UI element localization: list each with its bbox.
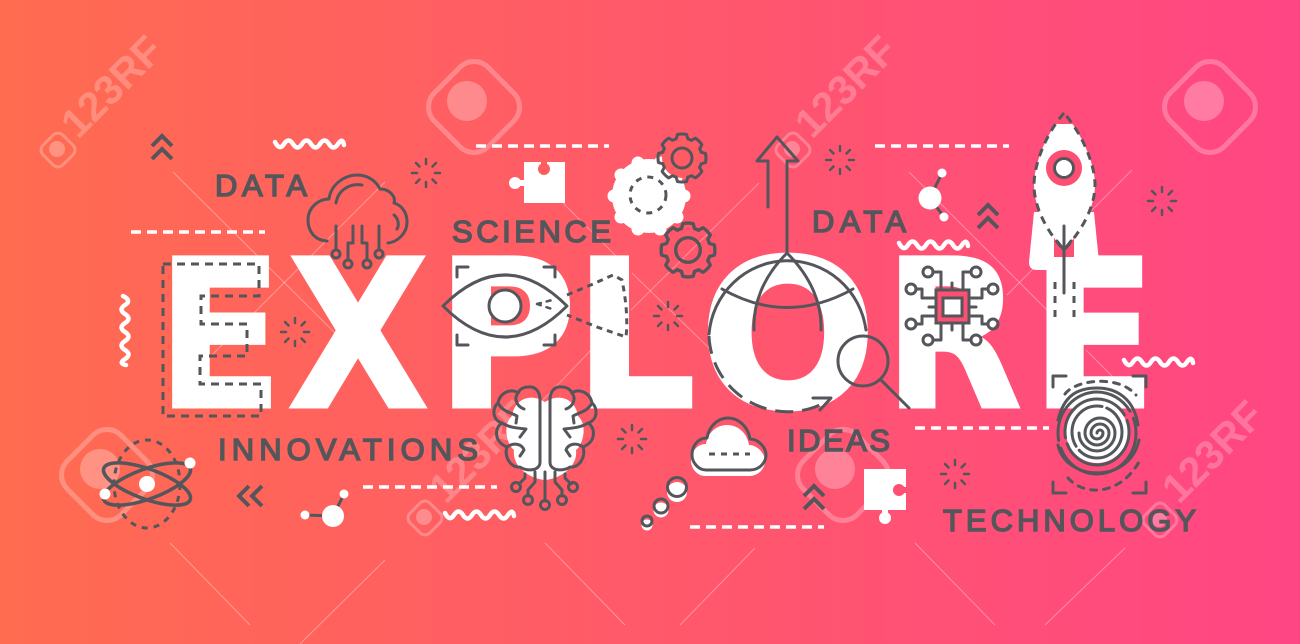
icon: atom — [99, 440, 196, 528]
title: EXPLORE: O — [699, 215, 877, 456]
label: SCIENCE: SCIENCE — [452, 214, 611, 249]
title: EXPLORE — [156, 215, 1156, 456]
title: EXPLORE: E — [1031, 216, 1156, 456]
icon: microchip — [906, 267, 998, 345]
watermark stamps: 123RF — [52, 27, 171, 146]
icon: outline gear bottom — [661, 223, 715, 277]
white waves — [122, 140, 1193, 518]
dashed white lines — [131, 146, 1049, 527]
watermark stamps: 123RF — [1153, 392, 1272, 511]
watermark stamps: 123RF — [786, 27, 905, 146]
icon: puzzle top — [509, 160, 565, 203]
icon: brain — [494, 387, 596, 510]
label: IDEAS: IDEAS — [787, 423, 890, 458]
icon: outline gear top — [658, 134, 706, 182]
label: DATA right: DATA — [812, 204, 906, 239]
title: EXPLORE: E — [156, 217, 283, 456]
label: DATA left: DATA — [215, 168, 307, 203]
icon: cloud circuit — [308, 175, 407, 268]
chevrons — [152, 136, 998, 509]
icon: big white gear — [608, 156, 690, 236]
label: INNOVATIONS: INNOVATIONS — [218, 432, 478, 467]
icon: eye and vision cone — [443, 267, 627, 345]
icon: small cloud — [691, 418, 766, 476]
icon: bubbles — [642, 478, 687, 530]
icon: dashed E outline — [163, 264, 261, 416]
icon: magnifier — [838, 336, 909, 408]
title: EXPLORE: L — [574, 215, 696, 456]
icon: globe — [709, 253, 866, 412]
sparkles — [281, 146, 1176, 488]
watermark stamps: 123RF — [420, 392, 539, 511]
watermark stamps — [38, 27, 1272, 540]
icon: growth arrow — [757, 137, 798, 252]
icon: rocket — [1029, 113, 1099, 322]
label: TECHNOLOGY: TECHNOLOGY — [943, 503, 1196, 538]
icon: puzzle bottom — [864, 469, 907, 524]
icon: molecule bottom — [300, 490, 348, 527]
title: EXPLORE: R — [884, 216, 1022, 456]
title: EXPLORE: X — [288, 216, 429, 456]
title: EXPLORE: P — [436, 215, 576, 456]
icon: molecule top — [918, 168, 948, 222]
icon: fingerprint — [1053, 376, 1146, 493]
